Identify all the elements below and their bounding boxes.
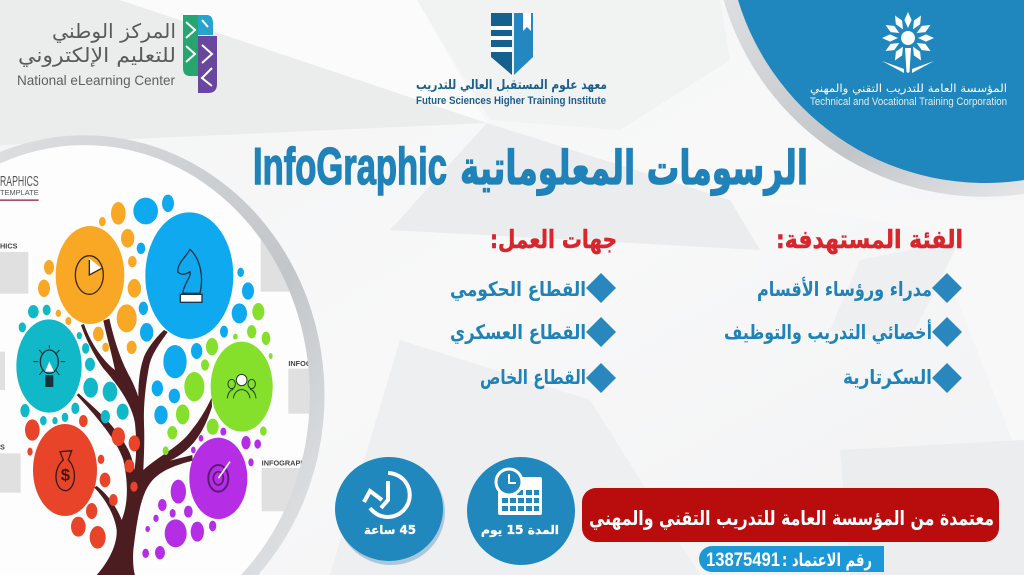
duration badge: ‫المدة 15 يوم‬	[481, 523, 559, 538]
teal group with light bulb icon	[16, 305, 129, 425]
orange group with clock icon	[38, 202, 141, 354]
icon: calendar with clock	[496, 469, 542, 515]
template heading fragment	[0, 174, 39, 201]
icon: NELC mark	[183, 15, 217, 93]
accreditation number: 13875491	[706, 550, 780, 571]
duration badge	[467, 457, 575, 565]
logo: National eLearning Center: National eLearning Center	[17, 72, 175, 88]
list item 1: القطاع الحكومي	[450, 277, 586, 302]
accreditation banner	[582, 488, 999, 542]
green group with people icon	[163, 303, 273, 455]
template heading fragment: TEMPLATE	[0, 188, 39, 197]
list item 2: القطاع العسكري	[450, 320, 586, 345]
logo: Technical and Vocational Training Corporation	[810, 12, 1007, 108]
heading: target audience: الفئة المستهدفة:‏	[776, 225, 963, 255]
template text fragments: S	[0, 442, 5, 451]
purple group with target icon	[142, 428, 261, 559]
template heading fragment: RAPHICS	[0, 174, 39, 190]
logo: Technical and Vocational Training Corporation: المؤسسة العامة للتدريب التقني والمهني	[810, 82, 1007, 95]
icon: star emblem	[882, 12, 934, 73]
blue group with chess knight icon	[133, 195, 254, 424]
panel: tree infographic lens	[0, 135, 325, 575]
hours badge	[335, 457, 445, 565]
accreditation number	[699, 546, 884, 572]
template text fragments: HICS	[0, 242, 18, 251]
template text fragments: INFOG	[288, 359, 312, 368]
title: InfoGraphic	[253, 138, 447, 196]
logo: Future Sciences Higher Training Institute: معهد علوم المستقبل العالي للتدريب	[416, 78, 607, 93]
template text fragments	[0, 240, 314, 511]
icon: shield with book	[491, 13, 533, 75]
list item 3: القطاع الخاص	[480, 365, 586, 389]
logo: National eLearning Center	[17, 15, 217, 93]
list item 1: مدراء ورؤساء الأقسام	[757, 276, 932, 301]
red group with money bag icon: $	[61, 466, 71, 485]
heading: employers: جهات العمل:‏	[490, 225, 617, 255]
hours badge: ‫45 ساعة‬	[364, 523, 416, 537]
logo: Future Sciences Higher Training Institute	[416, 13, 607, 107]
red group with money bag icon	[25, 415, 140, 549]
logo: National eLearning Center: المركز الوطني	[52, 19, 176, 44]
top right blue circle	[724, 0, 1024, 197]
logo: National eLearning Center: للتعليم الإلكتروني	[18, 43, 176, 68]
logo: Future Sciences Higher Training Institute: Future Sciences Higher Training Institute	[416, 95, 606, 107]
title	[253, 138, 808, 196]
accreditation number: : رقم الاعتماد‏	[782, 550, 872, 571]
list item 2: أخصائي التدريب والتوظيف	[724, 318, 932, 345]
icon: clock with arrow	[364, 473, 410, 517]
template text fragments: INFOGRAPHIC	[262, 458, 314, 467]
list item 3: السكرتارية	[843, 365, 932, 389]
panel: employers	[450, 225, 617, 393]
panel: target audience	[724, 225, 963, 393]
tree trunk and branches	[77, 319, 212, 575]
title: الرسومات المعلوماتية	[460, 141, 808, 196]
